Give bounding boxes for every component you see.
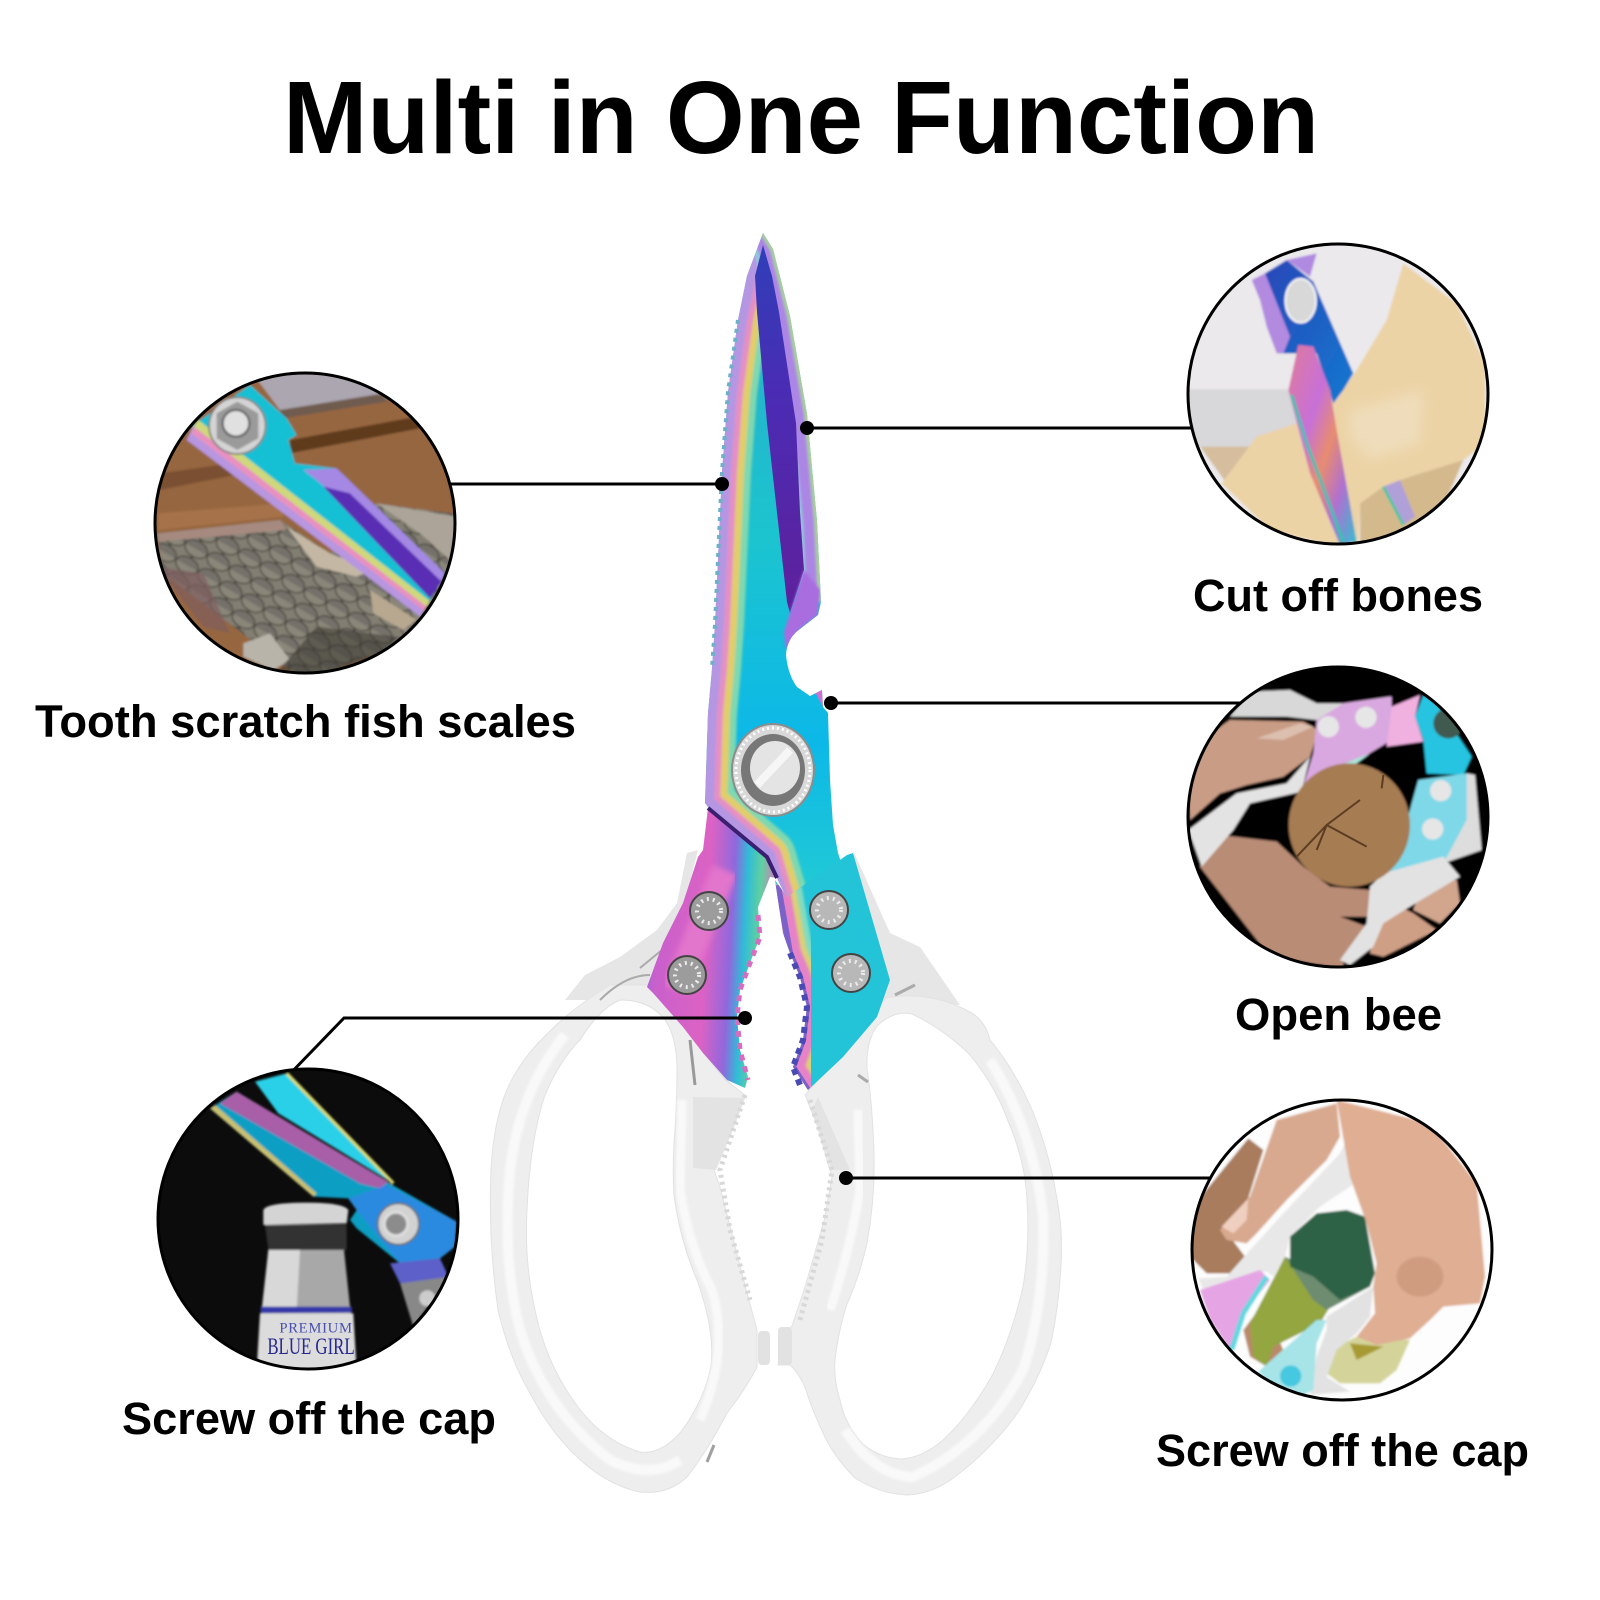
label: left cap: Screw off the cap (122, 1393, 496, 1444)
right transparent handle (778, 850, 1062, 1495)
pivot screw (732, 724, 814, 816)
callout line: opener (824, 696, 1248, 710)
callout line: left cap (285, 1011, 752, 1079)
blade serration (712, 320, 738, 669)
panel: fish scale circle (150, 370, 463, 680)
left blade and grip (647, 810, 775, 1088)
scissors product illustration (490, 225, 1062, 1495)
iridescent blade (705, 233, 840, 897)
label: open: Open bee (1235, 989, 1442, 1040)
panel: jar cap circle (1187, 1097, 1500, 1407)
panel: bottle opener circle: PREMIUM (279, 1321, 352, 1337)
callout line: fish scales (450, 477, 729, 491)
teeth on left grip (737, 915, 760, 1080)
left transparent handle (490, 850, 770, 1492)
label: bones: Cut off bones (1193, 570, 1483, 621)
panel: cut bones circle (1183, 240, 1497, 550)
panel: bottle opener circle: BLUE GIRL (267, 1334, 355, 1360)
right grip (775, 853, 890, 1090)
grip rivets (668, 891, 870, 994)
teeth on right grip (790, 953, 807, 1085)
title: Multi in One Function (283, 60, 1319, 175)
callout line: bones (800, 421, 1192, 435)
panel: walnut circle (1183, 663, 1497, 973)
label: fish scales: Tooth scratch fish scales (35, 696, 576, 747)
label: right cap: Screw off the cap (1156, 1425, 1529, 1476)
panel: bottle opener circle (153, 1063, 467, 1373)
callout line: right cap (839, 1171, 1216, 1185)
cut line between blades (708, 808, 777, 878)
